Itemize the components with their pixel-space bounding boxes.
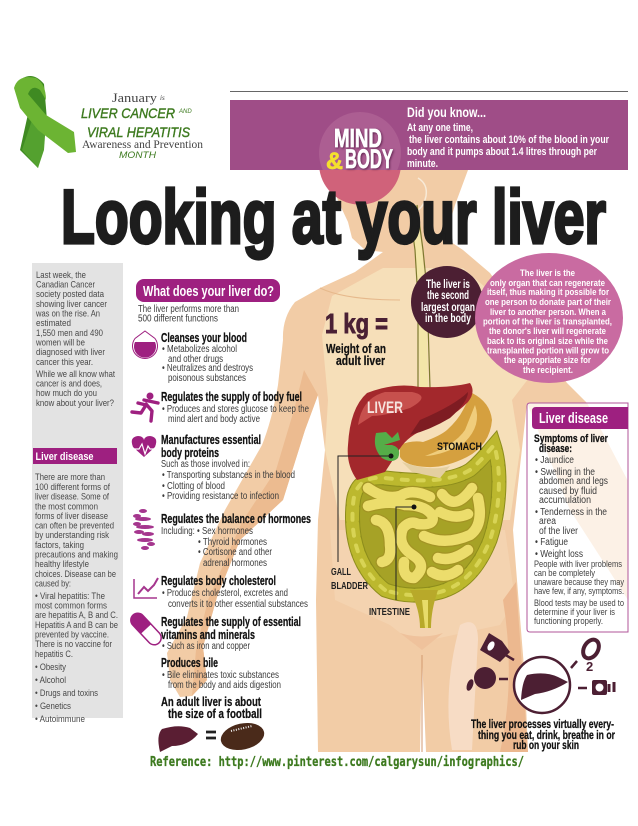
organ labels: STOMACH [437,441,482,453]
icon: bottle [480,633,510,662]
symptoms list: • Jaundice [535,455,574,466]
sidebar intro text: 1,550 men and 490 [36,328,103,339]
function: essential proteins: body proteins [161,446,219,460]
arrow: oxygen to liver [571,661,577,668]
sidebar disease text: • Genetics [35,701,71,712]
icon: runner [132,392,158,421]
intro text [138,304,239,325]
sidebar intro text: Canadian Cancer [36,280,96,291]
function: vitamins and minerals: • Such as iron and copper [162,641,251,652]
sidebar disease text: • Obesity [35,662,66,673]
function: essential proteins: Manufactures essential [161,433,261,447]
weight callout [325,308,388,368]
weight callout: Weight of an [326,342,386,356]
function: cleanses your blood: • Neutralizes and destroys [162,363,253,374]
arrow: apple to liver [499,678,508,680]
callout: regeneration: portion of the liver is transplanted, [483,317,612,328]
icon: liver in circle [514,657,570,713]
symptoms list: disease: [539,443,572,455]
pointer line: intestine [396,504,416,600]
heading: what does your liver do [136,279,280,302]
body illustration [167,165,638,752]
stomach [400,393,492,467]
mind and body badge: & [326,148,343,175]
football size fact: An adult liver is about [161,694,261,709]
function: hormones [161,512,311,569]
diagram: liver processes [465,633,615,752]
callout: regeneration: transplanted portion will grow to [487,346,609,357]
sidebar disease text: 100 different forms of [35,482,110,493]
symptoms note: can be completely [534,568,595,578]
did you know banner: At any one time, [407,122,473,134]
gallbladder [375,432,400,461]
sidebar disease text: factors, taking [35,540,84,551]
awareness heading: Awareness and Prevention [82,137,203,151]
panel: liver disease symptoms [527,403,628,632]
symptoms note: functioning properly. [534,616,603,626]
callout: regeneration: back to its original size while the [487,336,608,347]
function: cholesterol: • Produces cholesterol, excretes and [162,588,288,599]
icon: oxygen [580,637,602,674]
reference link: Reference: http://www.pinterest.com/calgarysun/infographics/ [150,755,524,770]
arrow: skin product to liver [578,687,587,689]
sidebar disease text: • Viral hepatitis: The [35,591,105,602]
sidebar disease text: caused by: [35,579,71,590]
sidebar disease text: prevented by vaccine. [35,630,109,641]
organ labels: BLADDER [331,580,368,592]
organ labels: INTESTINE [369,606,410,618]
symptoms list: Symptoms of liver [534,433,609,445]
function: produces bile: • Bile eliminates toxic substances [162,670,279,681]
function: cleanses your blood: poisonous substances [168,373,246,384]
football size fact: the size of a football [168,706,262,721]
sidebar disease text: most common forms [35,601,107,612]
sidebar intro text [35,270,115,409]
awareness heading: AND [178,109,192,115]
awareness heading: is [160,94,165,102]
function: vitamins and minerals: vitamins and minerals [161,628,255,642]
sidebar intro text: showing liver cancer [36,299,108,310]
arm hidden at right margin [628,390,638,630]
function: cleanses your blood: Cleanses your blood [161,331,247,345]
icon: oxygen: 2 [586,659,593,674]
callout: regeneration: the appropriate size for [504,355,591,366]
sidebar intro text: Last week, the [36,270,86,281]
mind and body badge: BODY [345,144,393,174]
sidebar disease text: the most common [35,501,98,512]
sidebar intro text: estimated [36,318,71,329]
awareness heading: VIRAL HEPATITIS [87,124,191,140]
callout: second largest organ: largest organ [421,300,475,314]
callout: regeneration: the recipient. [523,365,573,376]
sidebar disease text: There is no vaccine for [35,639,113,650]
arrow: bottle to liver [504,654,514,660]
pancreas [402,462,450,478]
function: body fuel [161,390,309,425]
function: cleanses your blood [161,331,253,384]
function: cholesterol: Regulates body cholesterol [161,574,276,588]
callout: regeneration: one person to donate part of their [485,297,611,308]
symptoms list: caused by fluid [539,486,597,497]
sidebar disease text: choices. Disease can be [35,569,116,580]
function: cleanses your blood: and other drugs [168,354,223,365]
caption: rub on your skin [513,740,579,752]
callout: second largest organ [411,266,483,338]
function: body fuel: mind alert and body active [168,414,260,425]
symptoms list: • Tenderness in the [535,507,607,518]
function: vitamins and minerals [161,615,301,652]
function: body fuel: • Produces and stores glucose to keep the [162,404,309,415]
sidebar disease text: • Alcohol [35,675,66,686]
icon: skin product [592,680,614,695]
symptoms list: abdomen and legs [539,476,608,487]
sidebar disease text [35,472,118,725]
symptoms heading: Liver disease [539,410,608,427]
sidebar disease text: are hepatitis A, B and C. [35,610,118,621]
callout: regeneration: itself, thus making it possible for [487,287,609,298]
symptoms note: determine if your liver is [534,607,615,617]
callout: regeneration: liver to another person. When a [490,307,607,318]
sidebar intro text: While we all know what [36,369,115,380]
icon: apple [465,667,496,692]
symptoms list: of the liver [539,526,579,537]
symptoms list: accumulation [539,495,591,506]
icon: dna helix [133,509,155,550]
sidebar heading: liver disease: Liver disease [36,451,94,463]
liver organ [348,383,473,480]
football size fact [161,694,262,721]
sidebar disease text: by understanding risk [35,530,109,541]
function: hormones: adrenal hormones [203,558,267,569]
did you know banner: Did you know... [407,104,486,120]
sidebar intro text: diagnosed with liver [36,347,106,358]
sidebar intro text: know about your liver? [36,398,114,409]
function: vitamins and minerals: Regulates the supply of essential [161,615,301,629]
symptoms note [534,559,624,626]
function: produces bile: from the body and aids digestion [168,680,281,691]
icon: liver equals football [158,719,267,754]
function: hormones: Including: • Sex hormones [161,526,253,537]
did you know banner: minute. [407,158,438,170]
function: hormones: • Cortisone and other [198,547,273,558]
callout: second largest organ: The liver is [426,277,470,291]
function: essential proteins: Such as those involved in: [161,459,250,470]
organ labels: GALL [331,566,351,578]
callout: regeneration [475,253,623,383]
awareness heading [81,90,203,160]
sidebar intro text: cancer this year. [36,357,93,368]
function: essential proteins [161,433,295,502]
sidebar disease text: hepatitis C. [35,649,73,660]
mind and body badge [319,112,401,205]
sidebar disease text: liver disease. Some of [35,492,109,503]
caption [471,719,615,752]
symptoms list: • Fatigue [535,537,568,548]
sidebar intro text: was on the rise. An [35,309,100,320]
function: essential proteins: • Clotting of blood [162,481,225,492]
sidebar disease text: • Autoimmune [35,714,85,725]
sidebar intro text: women will be [35,338,85,349]
pointer line: gall bladder [338,456,391,562]
organ labels: LIVER [367,398,403,417]
sidebar disease text: forms of liver disease [35,511,108,522]
callout: regeneration: the donor's liver will regenerate [489,326,606,337]
symptoms list [534,433,609,560]
heading: what does your liver do: What does your liver do? [143,283,274,300]
sidebar disease text: precautions and making [35,550,118,561]
callout: regeneration: The liver is the [520,268,575,279]
panel: left sidebar [32,263,123,725]
sidebar disease text: can often be prevented [35,521,114,532]
symptoms heading [532,407,628,429]
sidebar disease text: Hepatitis A and B can be [35,620,118,631]
icon: line chart [134,578,158,598]
function: body fuel: Regulates the supply of body fuel [161,390,302,404]
ribbon [14,76,76,168]
function: hormones: • Thyroid hormones [198,537,267,548]
callout: regeneration: only organ that can regenerate [490,278,605,289]
weight callout: 1 kg = [325,308,388,339]
icon: heart with pulse [131,436,158,457]
icon: pill [128,610,164,648]
sidebar disease text: • Drugs and toxins [35,688,98,699]
awareness heading: MONTH [119,150,157,160]
function: hormones: Regulates the balance of hormones [161,512,311,526]
awareness heading: LIVER CANCER [81,105,175,121]
function: essential proteins: • Providing resistance to infection [162,491,279,502]
icon: blood drop [132,331,158,358]
intro text: The liver performs more than [138,304,239,315]
symptoms list: area [539,516,556,527]
function: cleanses your blood: • Metabolizes alcohol [162,344,237,355]
intestines [352,445,499,628]
sidebar intro text: cancer is and does, [36,379,102,390]
function: essential proteins: • Transporting substances in the blood [162,470,295,481]
sidebar disease text: healthy lifestyle [35,559,89,570]
function: produces bile: Produces bile [161,656,218,670]
symptoms list: • Swelling in the [535,467,595,478]
mind and body badge: MIND [334,123,382,153]
sidebar heading: liver disease [33,448,117,464]
top rule [230,90,628,92]
symptoms list: • Weight loss [535,549,583,560]
function: cholesterol [161,574,308,610]
sidebar disease text: There are more than [35,472,105,483]
function: cholesterol: converts it to other essential substances [168,599,308,610]
function: produces bile [161,656,281,691]
awareness heading: January [112,90,158,105]
organ labels [331,398,482,618]
did you know banner [230,100,628,170]
weight callout: adult liver [336,354,385,368]
callout: second largest organ: the second [427,288,469,302]
callout: second largest organ: in the body [425,311,471,325]
sidebar intro text: how much do you [36,388,97,399]
intro text: 500 different functions [138,314,218,325]
sidebar intro text: society posted data [36,289,105,300]
